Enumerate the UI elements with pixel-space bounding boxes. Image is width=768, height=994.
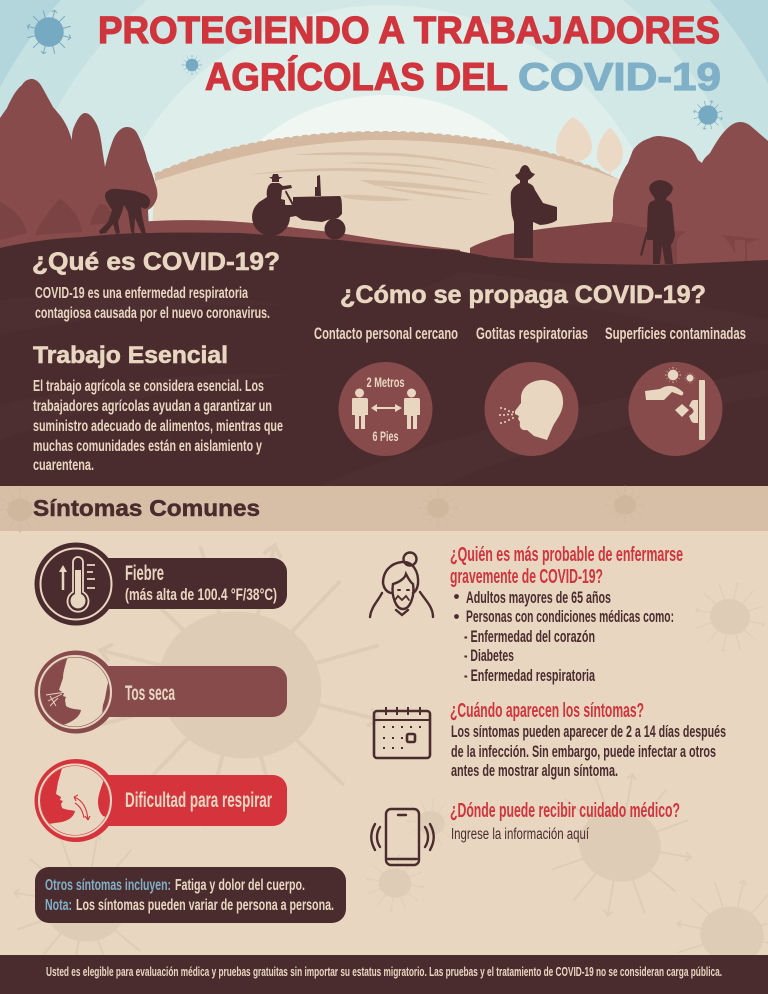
symptom: fever: Fiebre [125,562,164,585]
note box: Nota: [45,897,72,914]
note box: Otros síntomas incluyen: [45,877,171,894]
icon: calendar [374,707,430,758]
text: when [451,723,726,780]
icon: older woman [370,552,433,617]
text: essential work: trabajadores agrícolas ayudan a garantizar un [33,398,272,415]
trees left [0,79,157,262]
symptom: dry cough [30,650,287,734]
text: when: antes de mostrar algun síntoma. [451,762,618,780]
list: who is at risk: - Diabetes [464,647,514,665]
text: essential work: El trabajo agrícola se considera esencial. Los [33,378,264,395]
text: COVID-19 definition: contagiosa causada por el nuevo coronavirus. [35,305,270,322]
tractor [252,174,346,240]
icon: distancing: 2 Metros [366,374,405,390]
icon: phone [371,809,434,865]
icon: small virus [182,55,202,75]
footer [0,955,768,994]
list: who is at risk: - Enfermedad respiratoria [464,667,596,685]
icon: distancing [338,362,432,456]
note box [35,867,346,923]
text: essential work: cuarentena. [33,457,94,474]
title: COVID-19 [518,56,721,99]
heading: what is COVID-19: ¿Qué es COVID-19? [32,248,280,276]
spread labels [314,324,746,343]
pale distant trees [556,117,623,180]
title: AGRÍCOLAS DEL [205,55,508,99]
farmer bending [99,189,150,234]
shrubs in foreground left [0,198,112,240]
note box: Los síntomas pueden variar de persona a persona. [76,897,334,914]
title: PROTEGIENDO A TRABAJADORES [98,10,720,52]
icon: respiratory droplets [484,362,578,456]
trees right [600,122,768,265]
text: essential work [33,378,283,474]
symptoms header band: Síntomas Comunes [33,495,260,521]
background viruses [2,510,768,994]
mid-ground hills [140,220,768,275]
text: COVID-19 definition [35,285,270,322]
heading: when: ¿Cuándo aparecen los síntomas? [450,700,644,722]
symptoms header band [0,486,768,532]
text: essential work: suministro adecuado de alimentos, mientras que [33,418,283,435]
heading: how it spreads: ¿Cómo se propaga COVID-19? [340,281,706,309]
dark ground panel [0,233,768,486]
farmer with basket [511,165,557,258]
icon: distancing: 6 Pies [372,428,399,444]
list: who is at risk [454,589,674,685]
icon: virus top left [22,5,76,59]
farmer with hat [640,180,675,264]
note box: Fatiga y dolor del cuerpo. [175,877,305,894]
list: who is at risk: Adultos mayores de 65 años [466,589,611,607]
icon: contaminated surface [628,362,722,456]
symptom: difficulty breathing [30,759,287,842]
heading: who [450,544,683,588]
text: COVID-19 definition: COVID-19 es una enfermedad respiratoria [35,285,248,302]
field hill [150,132,640,265]
spread labels: Gotitas respiratorias [476,324,588,343]
title [98,10,721,99]
spread labels: Contacto personal cercano [314,324,458,343]
list: who is at risk: - Enfermedad del corazón [464,628,595,646]
text: essential work: muchas comunidades están en aislamiento y [33,438,262,455]
icon: virus right [690,97,726,133]
sky background [0,0,768,725]
heading: essential work: Trabajo Esencial [33,342,228,369]
symptom: fever: (más alta de 100.4 °F/38°C) [125,585,277,604]
symptom: dry cough: Tos seca [125,682,175,705]
symptom: fever [34,542,287,626]
heading: who: gravemente de COVID-19? [450,566,603,588]
text: enter information: Ingrese la información aquí [451,826,590,843]
lower background [0,486,768,955]
shrubs and trunk right [677,229,768,264]
symptom: difficulty breathing: Dificultad para respirar [125,789,272,812]
